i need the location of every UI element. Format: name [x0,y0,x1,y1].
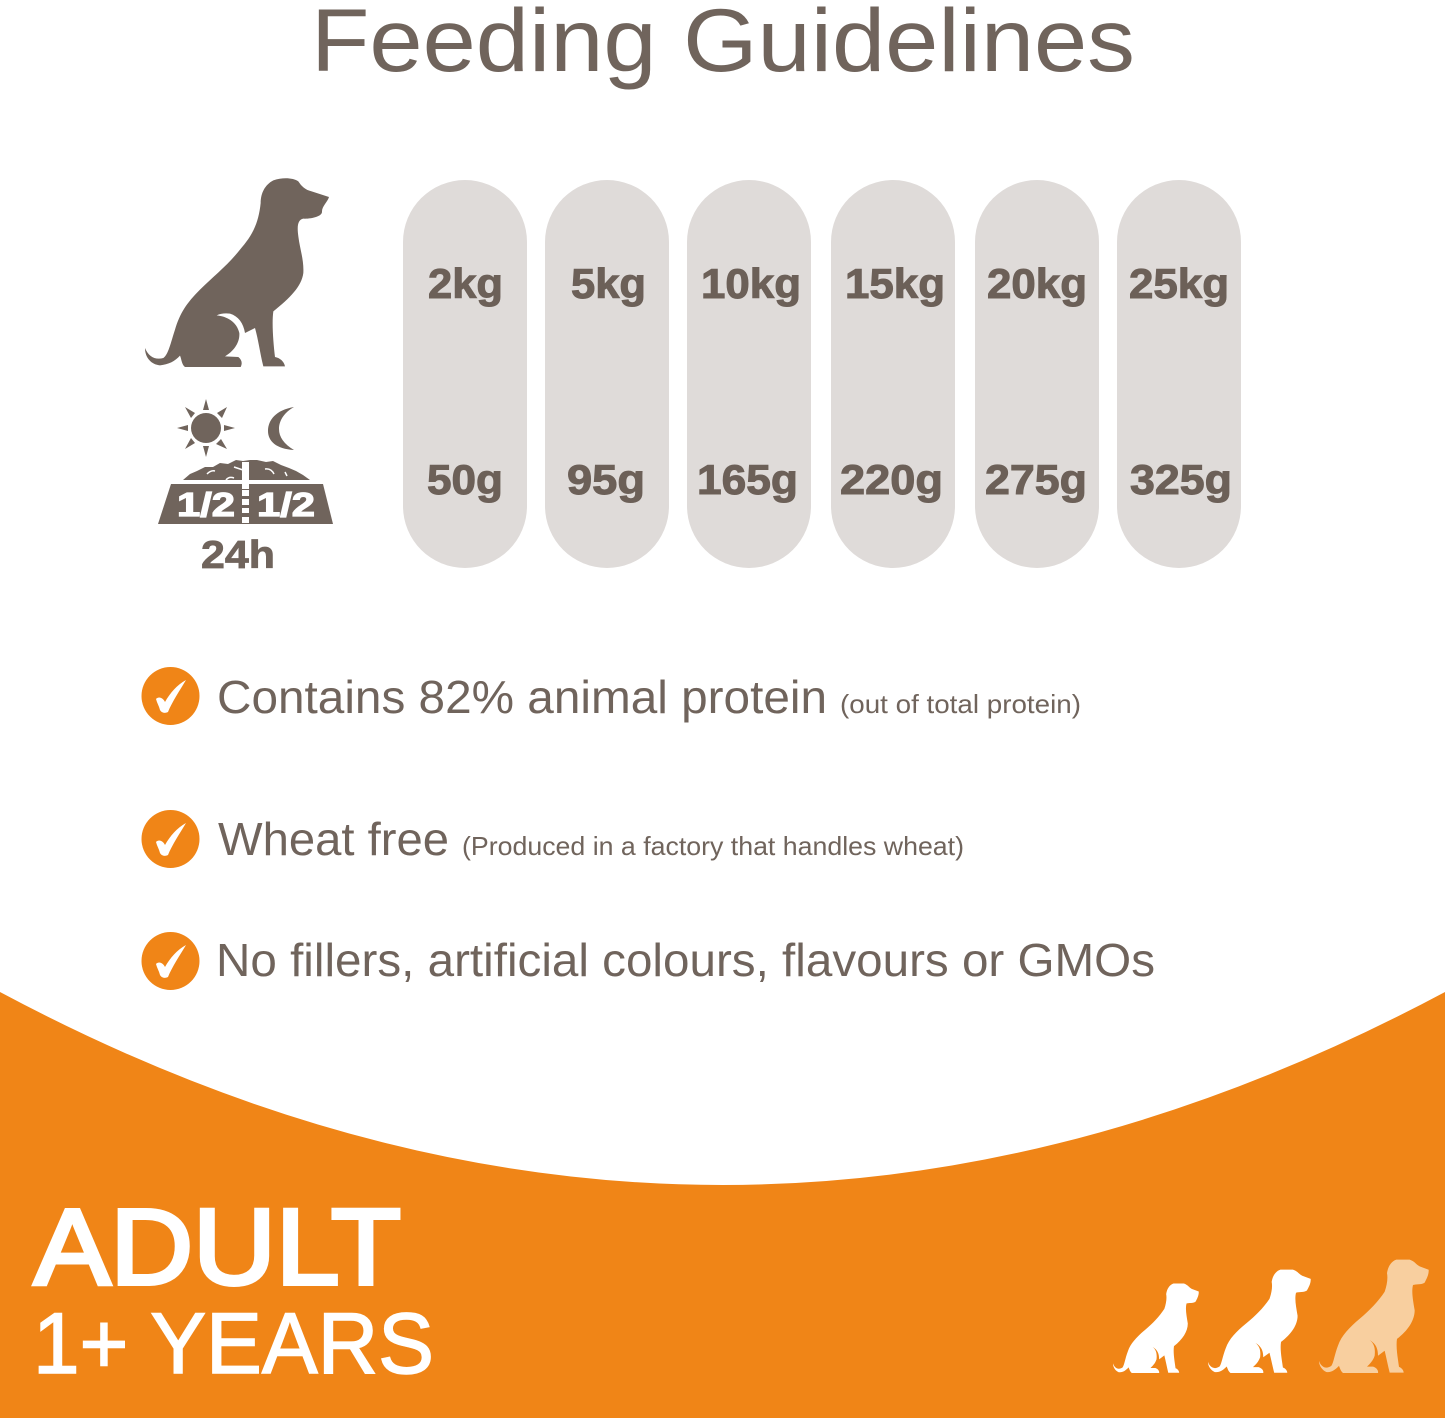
text: Wheat free [218,813,449,865]
bowl label right: 1/2 [257,486,315,523]
pill: 20kg 275g [975,180,1099,568]
pill: 15kg 220g [831,180,955,568]
pill: 25kg 325g: 25kg [1129,260,1229,307]
bowl label left: 1/2 [177,486,235,523]
pill: 5kg 95g: 5kg [571,260,646,307]
heading: adult: ADULT [34,1186,401,1307]
benefit: animal protein [142,667,1081,725]
pill: 10kg 165g [687,180,811,568]
icon: medium dog [1208,1270,1311,1373]
icons: dog sizes [1113,1260,1429,1373]
icon: large dog [1319,1260,1429,1373]
benefit: wheat free [142,810,964,868]
icon: check [142,667,200,725]
text: Contains 82% animal protein [217,671,827,723]
icon: moon [268,407,294,450]
icon: sitting dog [145,178,329,367]
pill: 10kg 165g: 165g [697,456,798,503]
pill: 25kg 325g [1117,180,1241,568]
benefit: no fillers [142,932,1155,990]
bowl divider [242,462,249,523]
orange footer band [0,992,1445,1418]
pill: 20kg 275g: 275g [985,456,1087,503]
pill: 2kg 50g [403,180,527,568]
subheading: years: 1+ YEARS [33,1296,434,1392]
pill: 2kg 50g: 50g [427,456,503,503]
life stage label [33,1186,434,1392]
icon: food mound [183,460,310,480]
pill: 15kg 220g: 15kg [845,260,945,307]
feeding table pills [403,180,1241,568]
icon: bowl [158,484,333,524]
pill: 5kg 95g: 95g [567,456,645,503]
note: (out of total protein) [840,689,1081,719]
pill: 25kg 325g: 325g [1130,456,1232,503]
icon: check [142,810,200,868]
note: (Produced in a factory that handles wheat) [462,831,964,861]
pill: 20kg 275g: 20kg [987,260,1087,307]
pill: 5kg 95g [545,180,669,568]
icon: check [142,932,200,990]
icon: small dog [1113,1284,1199,1373]
pill: 15kg 220g: 220g [840,456,943,503]
food mound highlights [207,467,287,480]
icon: sun [177,399,235,457]
24h label: 24h [201,534,275,577]
icon: feeding schedule bowl [158,399,333,577]
pill: 2kg 50g: 2kg [428,260,503,307]
pill: 10kg 165g: 10kg [701,260,801,307]
text: No fillers, artificial colours, flavours or GMOs [216,934,1155,986]
